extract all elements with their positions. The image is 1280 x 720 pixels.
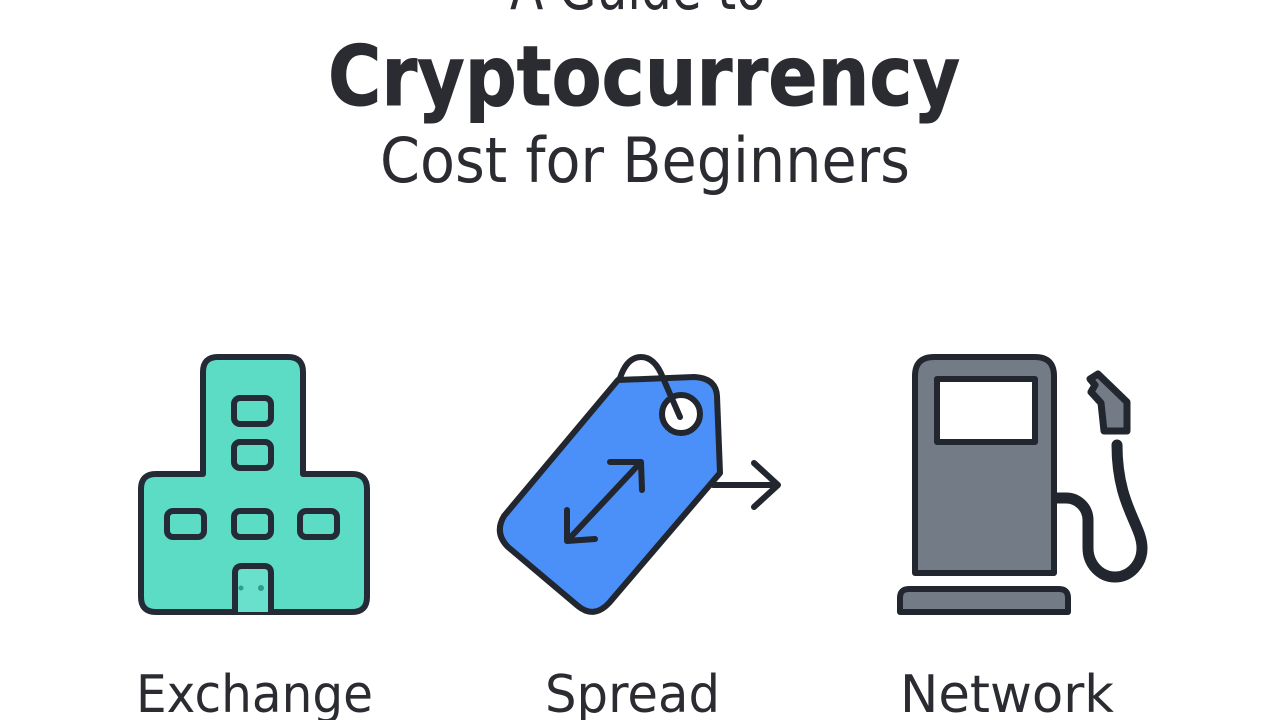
title block — [328, 0, 960, 197]
pump body — [915, 357, 1054, 573]
double arrow — [567, 462, 642, 541]
tag string — [620, 357, 680, 417]
tag body — [500, 377, 720, 612]
title line: Cryptocurrency: Cryptocurrency — [328, 28, 960, 125]
pump screen — [937, 379, 1035, 442]
hose — [1055, 445, 1142, 577]
tag hole — [662, 395, 700, 433]
right arrow — [713, 463, 778, 507]
icon: gas pump — [900, 357, 1142, 612]
icon: price tag with spread arrows — [500, 357, 778, 612]
title line: Cost for Beginners: Cost for Beginners — [380, 124, 910, 197]
icon: exchange building — [141, 357, 367, 612]
pump base — [900, 589, 1068, 612]
nozzle — [1090, 374, 1127, 431]
